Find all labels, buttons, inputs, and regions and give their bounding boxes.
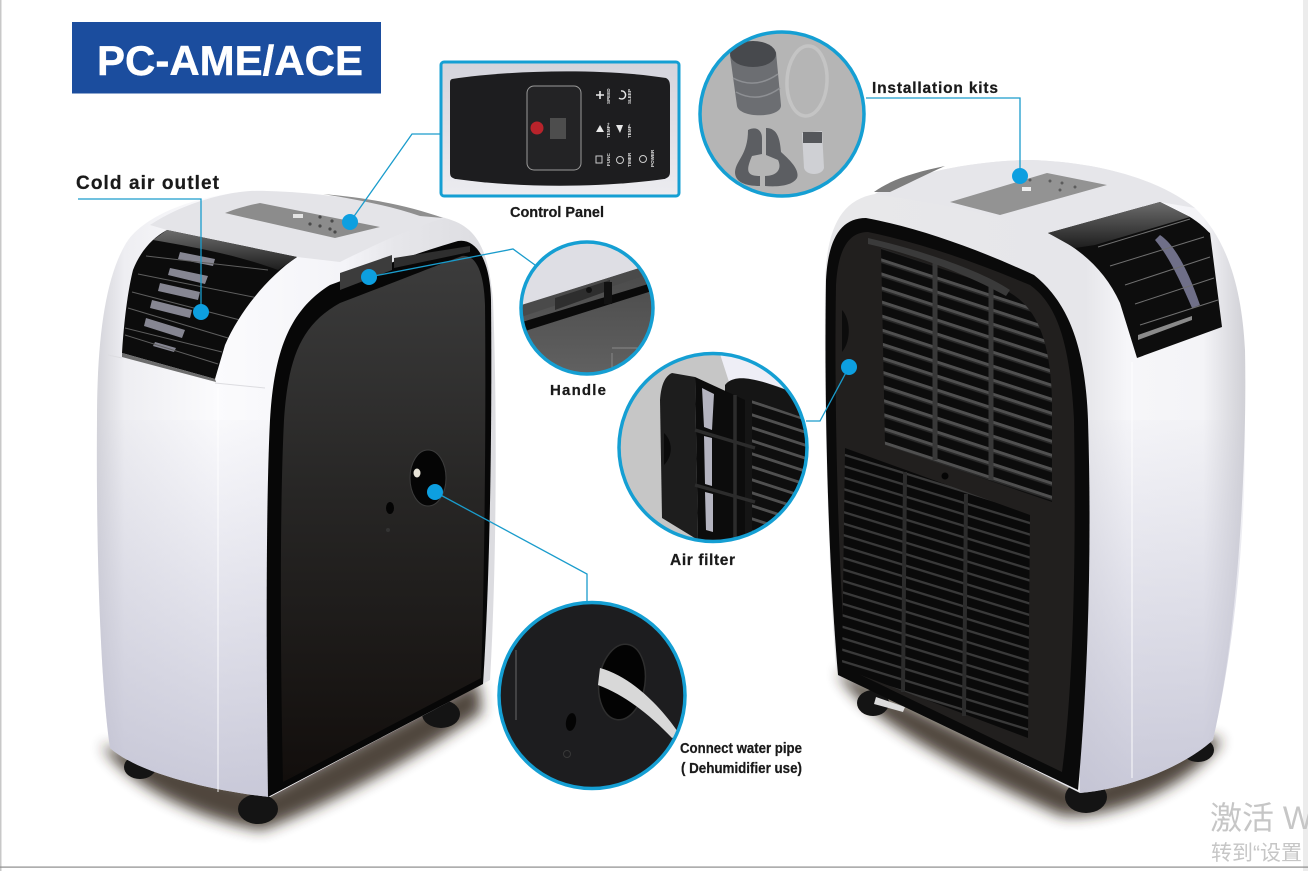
cold air vent left [122,230,297,382]
handle detail circle [518,240,658,380]
duct hose [730,52,781,115]
floor shadow right [838,670,1222,816]
top control strip right [950,173,1107,215]
top grey strip left [323,194,443,218]
label: handle: Handle [550,382,606,399]
label: connect water pipe: ( Dehumidifier use) [681,761,802,777]
air filter detail circle [615,350,815,550]
leader: installation kits [866,98,1028,184]
control panel callout [441,62,679,196]
label: connect water pipe: Connect water pipe [680,741,802,757]
leader: water pipe [427,484,587,601]
system watermark: 转到“设置 [1211,842,1302,865]
side seam highlight left [217,388,219,792]
control panel callout: TEMP- [627,123,632,138]
lower shell shading right [1078,420,1245,793]
door back panel right [826,218,1090,790]
top surface right [875,160,1195,233]
window adapter [735,128,798,186]
side seam highlight right [1131,362,1133,778]
label: installation kits: Installation kits [872,80,998,97]
control panel callout: TEMP+ [606,122,611,138]
leader: handle [361,249,535,285]
control panel callout: SPEED [606,88,611,104]
top control strip left [225,203,380,238]
leader: cold air outlet [78,199,209,320]
control panel callout: SLEEP [627,89,632,104]
air vent right [1048,202,1222,358]
control panel face [450,71,670,186]
display window [527,86,581,170]
label: control panel: Control Panel [510,205,604,221]
system watermark [1210,800,1308,865]
control panel callout: POWER [650,149,655,167]
title banner [72,22,381,94]
side seam left [108,355,265,388]
control panel callout: TIMER [627,152,632,167]
leader: control panel [342,134,441,230]
white shell right [825,160,1245,793]
wheels right [857,690,1214,813]
title banner: PC-AME/ACE [97,37,363,84]
lower grille [842,448,1030,738]
top surface left [150,191,445,262]
label: connect water pipe [680,741,802,777]
top grey strip right [874,166,945,192]
control buttons [596,91,646,164]
label: air filter: Air filter [670,552,735,569]
remote control [802,131,824,174]
lower shell shading left [97,420,270,797]
sealing ring [785,45,829,117]
installation kits circle [695,30,870,200]
label: cold air outlet: Cold air outlet [76,173,220,194]
right air conditioner unit [825,160,1245,816]
white shell left [97,191,496,797]
wheels left [124,700,460,824]
water pipe detail circle [495,598,690,793]
drain hole left [410,450,446,506]
filter grip [842,310,849,352]
upper grille [881,248,1052,502]
control panel callout: FUNC [606,153,611,166]
door panel left [267,241,491,797]
leader: air filter [806,359,857,421]
left air conditioner unit [97,191,496,830]
floor shadow left [102,680,482,830]
